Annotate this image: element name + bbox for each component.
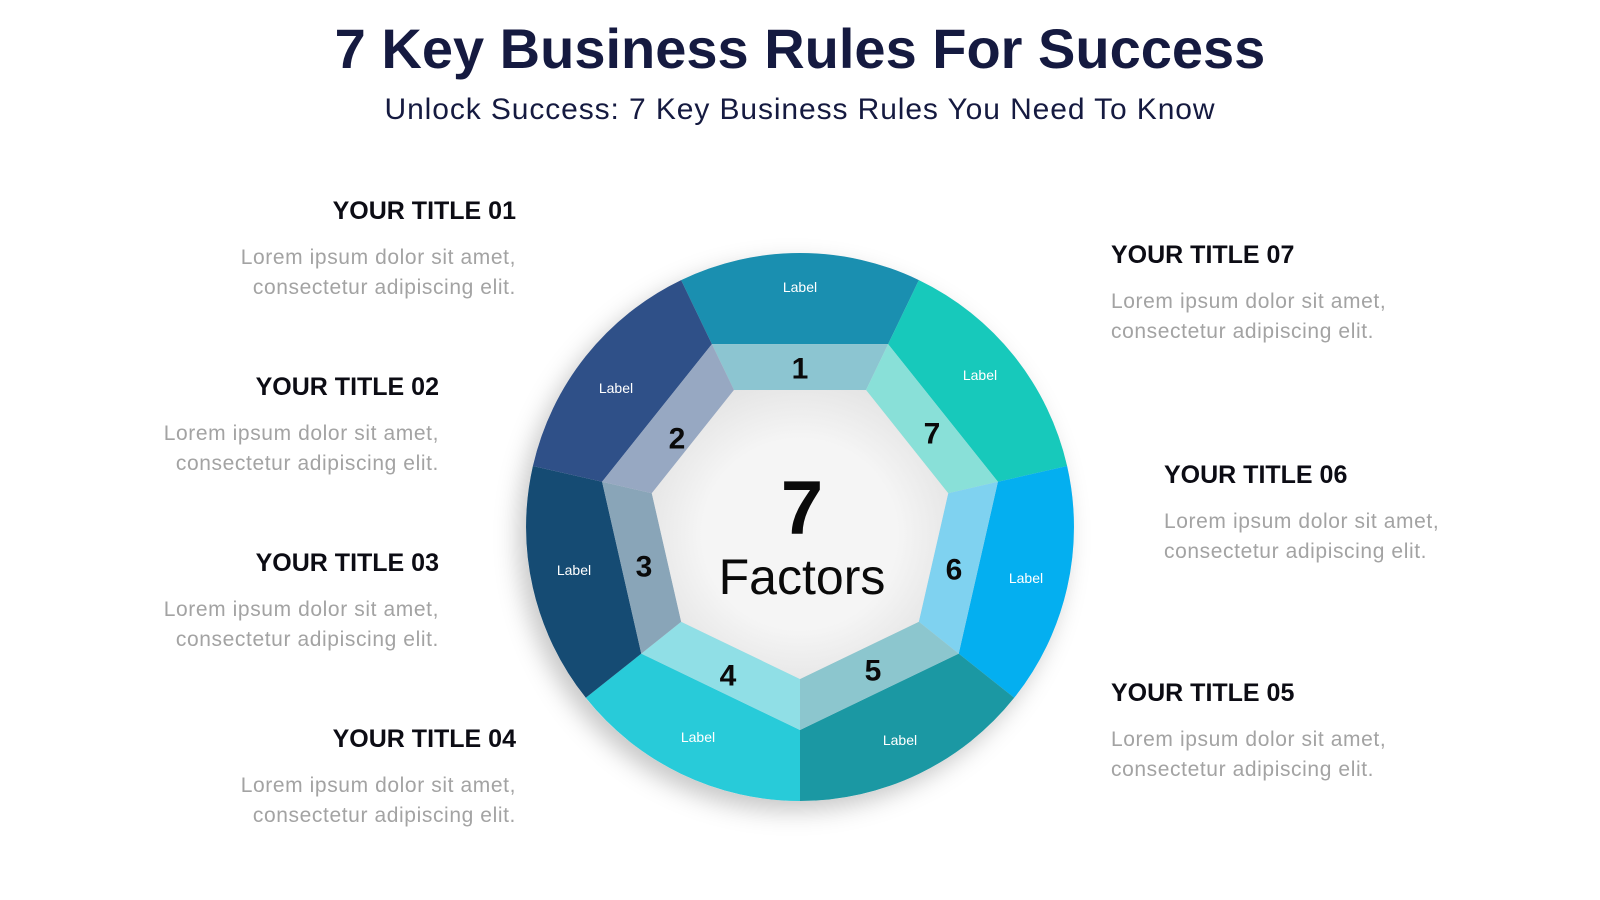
ring segment 7 [866, 344, 998, 493]
item 02: Lorem ipsum dolor sit amet, [164, 422, 439, 445]
outer segment 7 [888, 280, 1067, 482]
outer segment 4 [586, 654, 800, 801]
item 01: YOUR TITLE 01 [333, 197, 516, 225]
segment numbers: 7 [924, 418, 940, 450]
outer segment 6 [959, 466, 1074, 698]
item 02 [164, 373, 439, 475]
segment labels: Label [883, 732, 917, 748]
item 04: consectetur adipiscing elit. [253, 804, 516, 827]
title: 7 Key Business Rules For Success [335, 17, 1265, 80]
item 06: YOUR TITLE 06 [1164, 461, 1347, 489]
item 03: Lorem ipsum dolor sit amet, [164, 598, 439, 621]
center heptagon [652, 390, 948, 679]
item 04: YOUR TITLE 04 [333, 725, 516, 753]
segment numbers: 6 [946, 554, 962, 586]
segment labels: Label [963, 367, 997, 383]
item 06: Lorem ipsum dolor sit amet, [1164, 510, 1439, 533]
item 02: YOUR TITLE 02 [256, 373, 439, 401]
segment numbers: 4 [720, 660, 737, 692]
outer segment 3 [526, 466, 641, 698]
item 01 [241, 197, 516, 299]
subtitle: Unlock Success: 7 Key Business Rules You Need To Know [385, 93, 1215, 126]
ring segment 2 [602, 344, 734, 493]
item 03 [164, 549, 439, 651]
segment labels: Label [681, 729, 715, 745]
item 07: Lorem ipsum dolor sit amet, [1111, 290, 1386, 313]
outer segment 2 [533, 280, 712, 482]
item 07: YOUR TITLE 07 [1111, 241, 1294, 269]
ring segment 4 [641, 622, 800, 730]
item 06: consectetur adipiscing elit. [1164, 540, 1427, 563]
item 05: YOUR TITLE 05 [1111, 679, 1294, 707]
item 05 [1111, 679, 1386, 781]
center text [719, 466, 885, 605]
outer segment 5 [800, 654, 1014, 801]
segment numbers [636, 352, 962, 692]
item 01: consectetur adipiscing elit. [253, 276, 516, 299]
ring segment 6 [919, 482, 998, 654]
item 03: YOUR TITLE 03 [256, 549, 439, 577]
item 02: consectetur adipiscing elit. [176, 452, 439, 475]
segment numbers: 3 [636, 550, 652, 584]
item 07: consectetur adipiscing elit. [1111, 320, 1374, 343]
outer segment 1 [681, 253, 919, 344]
item 05: Lorem ipsum dolor sit amet, [1111, 728, 1386, 751]
item 01: Lorem ipsum dolor sit amet, [241, 246, 516, 269]
segment labels: Label [783, 279, 817, 295]
segment labels: Label [1009, 570, 1043, 586]
segment numbers: 1 [792, 352, 808, 386]
segment labels [557, 279, 1043, 748]
ring segment 5 [800, 622, 959, 730]
segment labels: Label [599, 380, 633, 396]
item 06 [1164, 461, 1439, 563]
segment labels: Label [557, 562, 591, 578]
item 04: Lorem ipsum dolor sit amet, [241, 774, 516, 797]
center text: 7 [781, 466, 823, 551]
item 07 [1111, 241, 1386, 343]
ring segment 1 [712, 344, 888, 390]
item 04 [241, 725, 516, 827]
center text: Factors [719, 549, 885, 605]
ring segment 3 [602, 482, 681, 654]
segment numbers: 2 [669, 422, 685, 456]
segment numbers: 5 [865, 654, 881, 688]
item 03: consectetur adipiscing elit. [176, 628, 439, 651]
item 05: consectetur adipiscing elit. [1111, 758, 1374, 781]
